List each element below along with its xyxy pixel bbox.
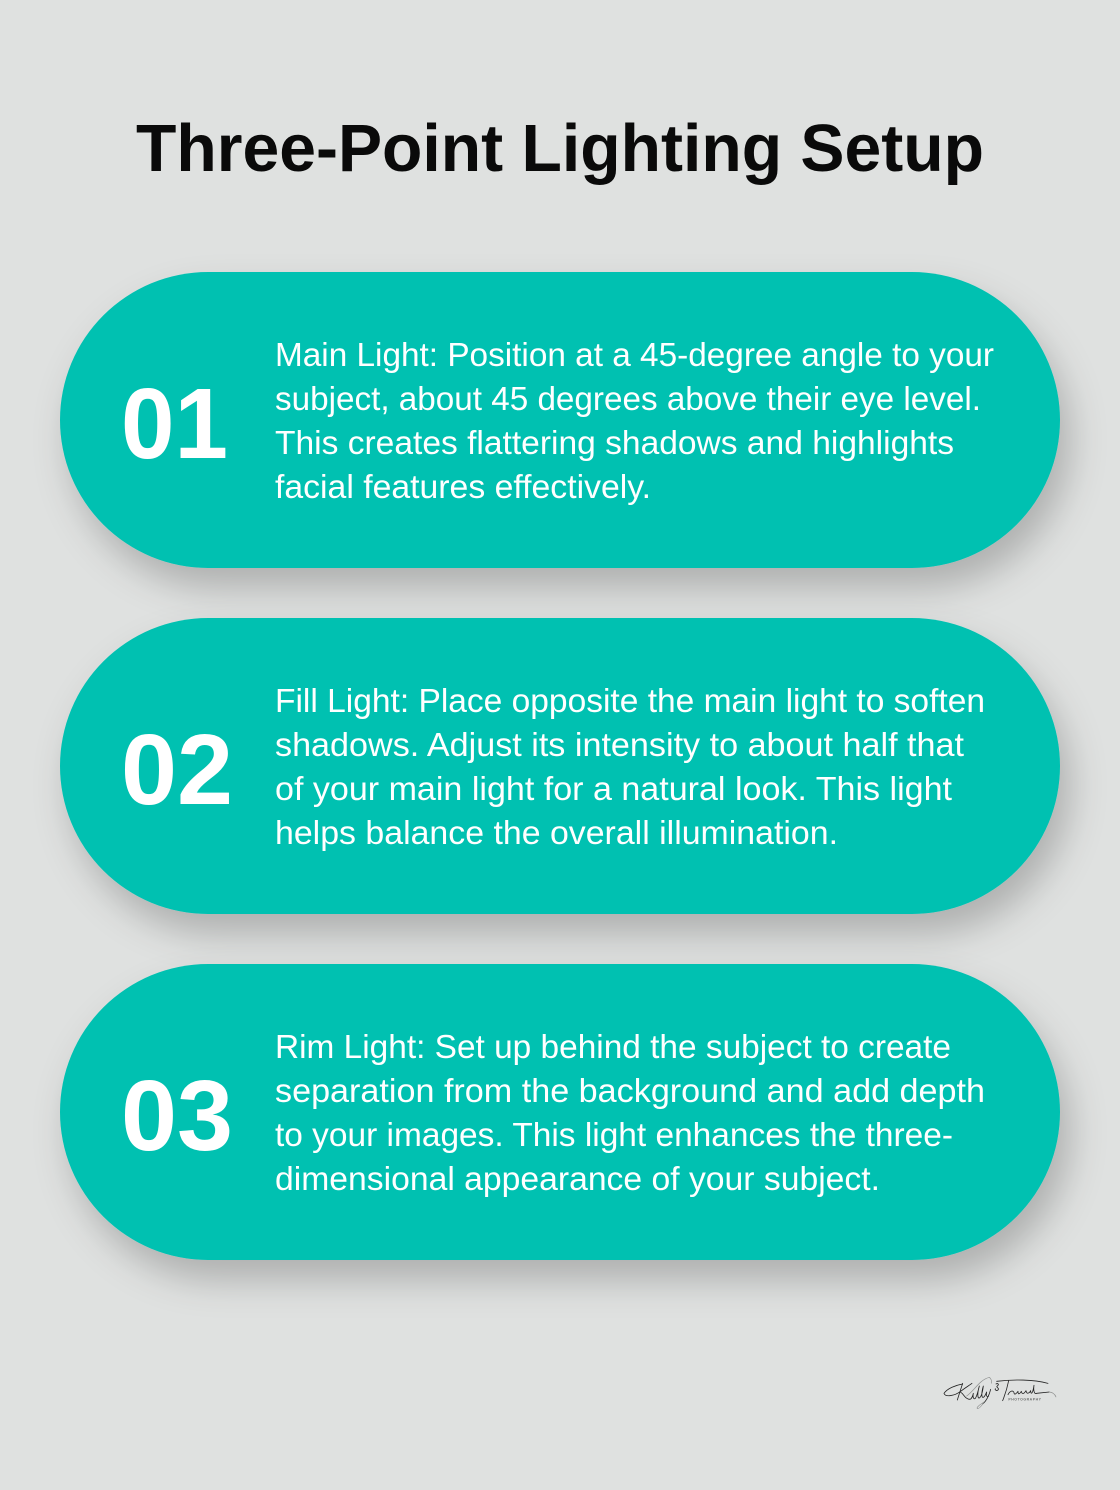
panel background 02 [60, 618, 1060, 914]
text: rim light description [275, 1028, 985, 1197]
panel background 03 [60, 964, 1060, 1260]
text: main light description [275, 336, 994, 505]
step number 01: 01 [121, 368, 228, 480]
text: main light description: subject, about 45 degrees above their eye level. [275, 380, 981, 417]
text: main light description: Main Light: Position at a 45-degree angle to your [275, 336, 994, 373]
text: main light description: facial features effectively. [275, 468, 651, 505]
text: fill light description: helps balance the overall illumination. [275, 814, 838, 851]
text: main light description: This creates flattering shadows and highlights [275, 424, 954, 461]
panel: step 02 fill light [60, 618, 1060, 914]
step number 02: 02 [121, 714, 233, 826]
text: fill light description [275, 682, 985, 851]
step number 03: 03 [121, 1060, 233, 1172]
logo: signature with photography wordmark [944, 1377, 1056, 1409]
text: rim light description: Rim Light: Set up behind the subject to create [275, 1028, 951, 1065]
text: fill light description: shadows. Adjust its intensity to about half that [275, 726, 964, 763]
text: fill light description: Fill Light: Place opposite the main light to soften [275, 682, 985, 719]
text: rim light description: to your images. This light enhances the three- [275, 1116, 953, 1153]
title: Three-Point Lighting Setup [136, 111, 984, 186]
text: rim light description: dimensional appearance of your subject. [275, 1160, 880, 1197]
panel background 01 [60, 272, 1060, 568]
text: rim light description: separation from the background and add depth [275, 1072, 985, 1109]
logo: signature with photography wordmark: PHOTOGRAPHY [1008, 1397, 1042, 1401]
text: fill light description: of your main light for a natural look. This light [275, 770, 952, 807]
panel: step 01 main light [60, 272, 1060, 568]
panel: step 03 rim light [60, 964, 1060, 1260]
